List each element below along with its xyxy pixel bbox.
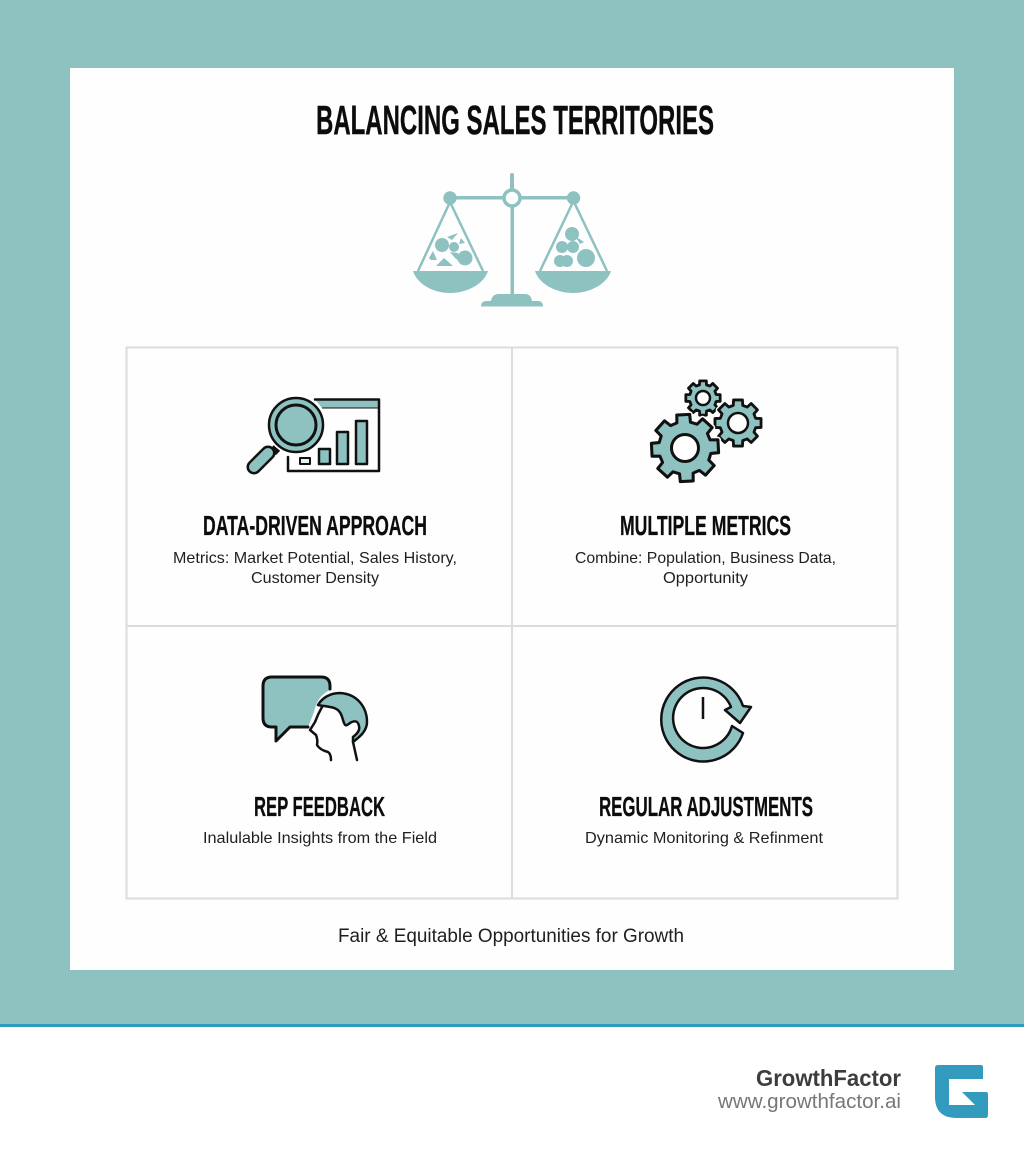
right pan shapes (554, 227, 595, 267)
body text: Metrics: Market Potential, Sales History, (173, 550, 457, 567)
body text: Opportunity (663, 570, 748, 587)
body text: Dynamic Monitoring & Refinment (585, 830, 824, 847)
closing line: Fair & Equitable Opportunities for Growth (338, 926, 684, 947)
panel: regular adjustments (585, 678, 824, 847)
body text: Combine: Population, Business Data, (575, 550, 836, 567)
icon: speech bubble and head (263, 677, 367, 760)
panel: rep feedback (203, 677, 437, 847)
panel: main white card (70, 68, 954, 970)
footer brand text: www.growthfactor.ai (717, 1090, 901, 1113)
heading: DATA-DRIVEN APPROACH (203, 510, 427, 541)
panel: data-driven approach (173, 395, 457, 587)
icon: GrowthFactor logo (935, 1065, 988, 1118)
footer brand text: GrowthFactor (756, 1065, 901, 1091)
body text (173, 550, 457, 587)
panel: multiple metrics (575, 381, 836, 587)
heading: MULTIPLE METRICS (620, 510, 791, 541)
title: BALANCING SALES TERRITORIES (316, 97, 714, 143)
footer divider (0, 1024, 1024, 1027)
icon: gears (650, 381, 761, 483)
footer brand text (717, 1065, 901, 1113)
heading: REGULAR ADJUSTMENTS (599, 791, 813, 822)
left pan shapes (429, 233, 472, 266)
icon: circular arrow clock (661, 678, 751, 761)
panel: quadrant grid (126, 347, 898, 898)
body text: Inalulable Insights from the Field (203, 830, 437, 847)
body text: Customer Density (251, 570, 379, 587)
body text (575, 550, 836, 587)
heading: REP FEEDBACK (254, 791, 385, 822)
icon: magnifier over chart (254, 395, 379, 471)
icon: balance scale (413, 173, 611, 306)
